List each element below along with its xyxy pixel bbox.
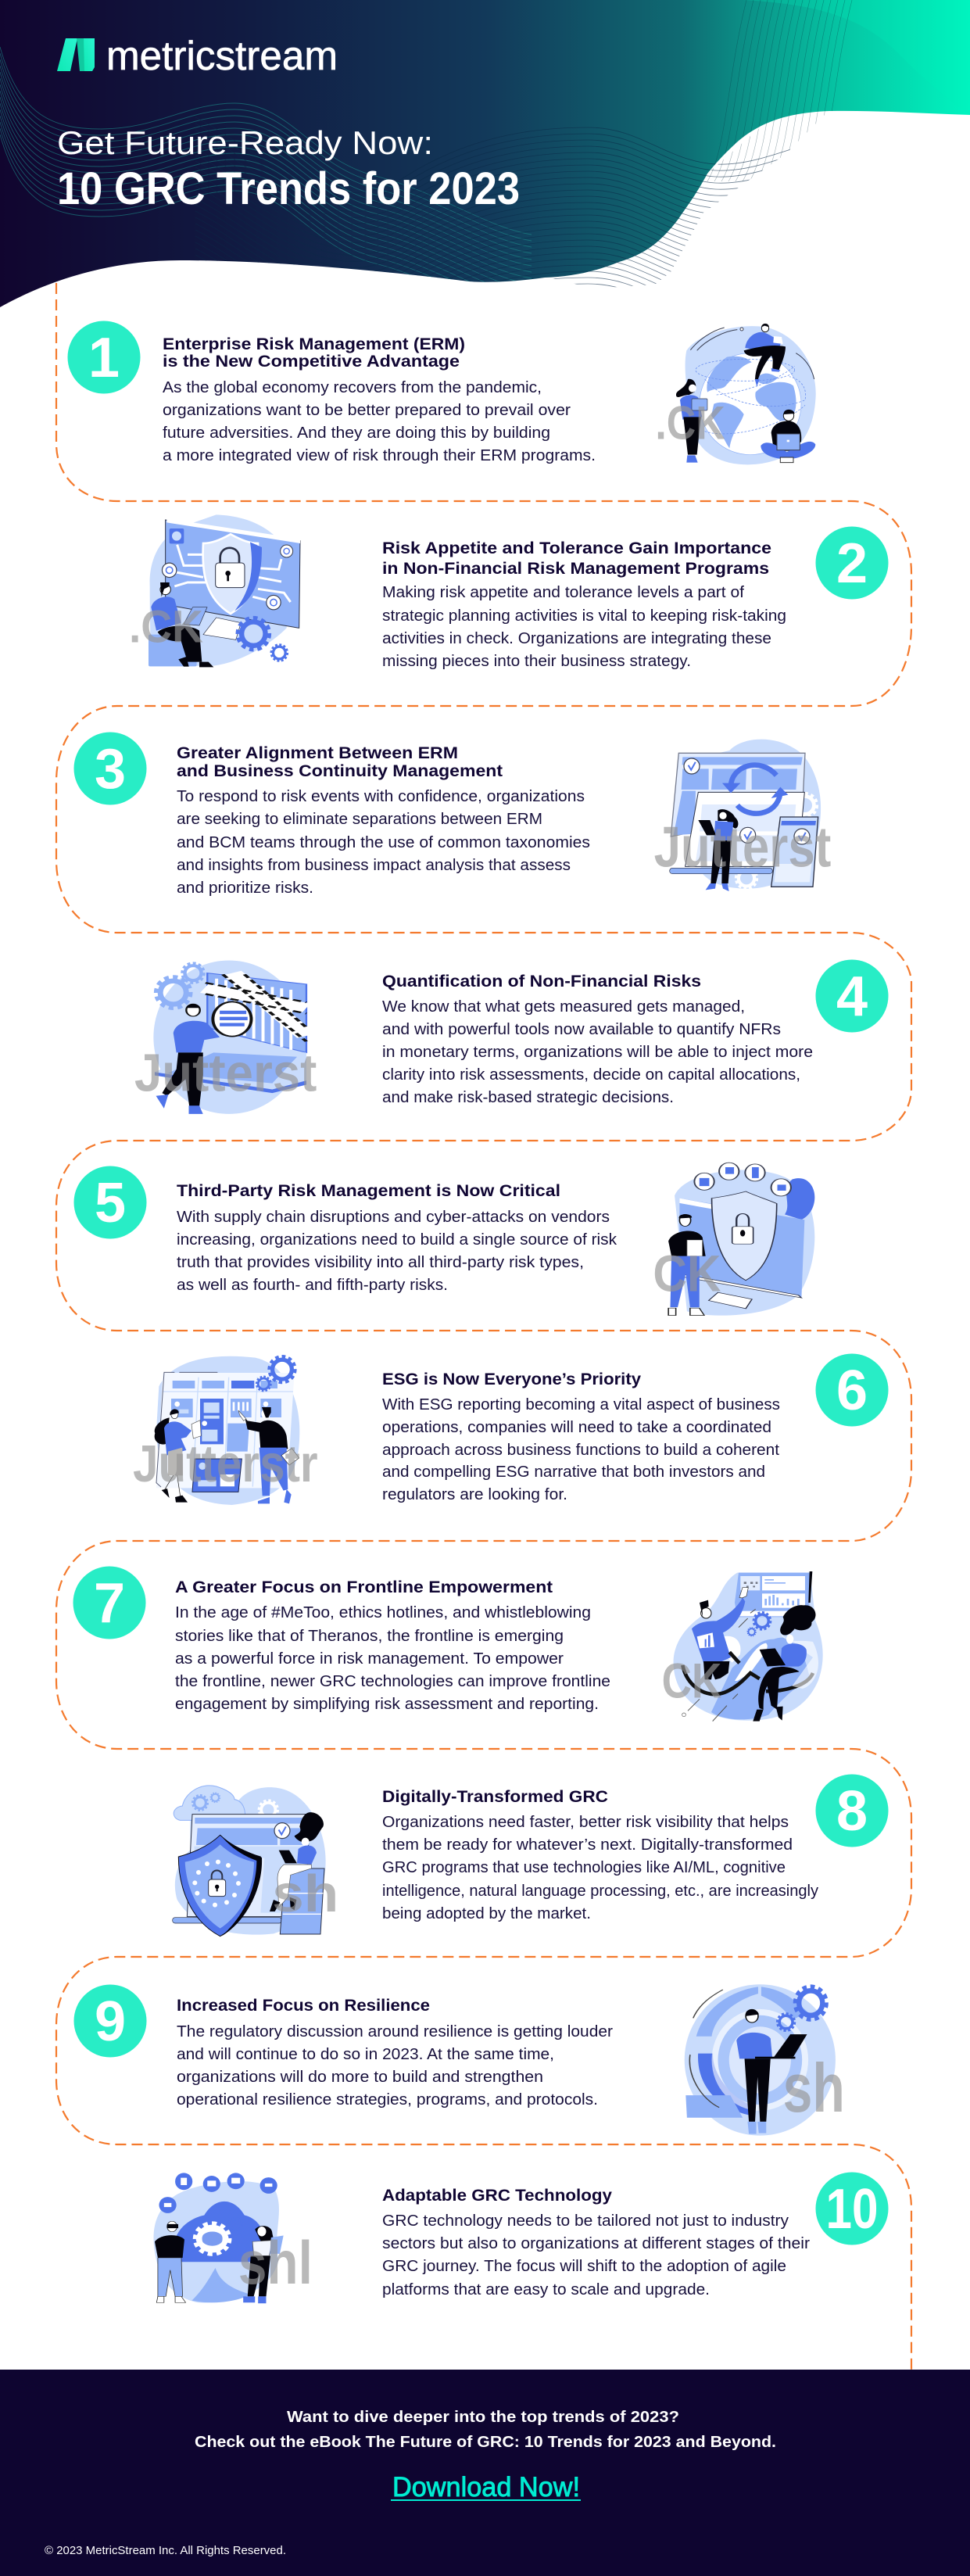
- badge: number 7: 7: [94, 1572, 125, 1635]
- text block: trend 4: We know that what gets measured gets managed,: [382, 998, 745, 1016]
- text block: trend 5: truth that provides visibility into all third-party risk types,: [177, 1254, 584, 1271]
- badge: number 3: 3: [95, 738, 126, 801]
- badge: number 8: 8: [836, 1780, 868, 1843]
- text block: trend 3: and BCM teams through the use of common taxonomies: [177, 834, 590, 851]
- illustration: sync across devices: Jutterst: [654, 815, 831, 879]
- text block: trend 9: The regulatory discussion around resilience is getting louder: [177, 2023, 613, 2040]
- heading: trend 7: A Greater Focus on Frontline Empowerment: [175, 1578, 553, 1596]
- badge: number 10: 10: [825, 2178, 879, 2241]
- text block: trend 10: GRC journey. The focus will shift to the adoption of agile: [382, 2258, 786, 2275]
- heading: trend 9: Increased Focus on Resilience: [177, 1997, 430, 2015]
- badge: number 6: 6: [836, 1360, 868, 1422]
- text block: trend 8: intelligence, natural language processing, etc., are increasingly: [382, 1883, 818, 1900]
- text block: trend 2: Making risk appetite and tolerance levels a part of: [382, 584, 744, 601]
- call to action text: Check out the eBook The Future of GRC: 10 Trends for 2023 and Beyond.: [195, 2433, 776, 2451]
- text block: trend 2: activities in check. Organizations are integrating these: [382, 630, 771, 647]
- text block: trend 6: [382, 1396, 780, 1503]
- heading: trend 3: and Business Continuity Management: [177, 762, 503, 780]
- badge: number 2: [816, 527, 888, 599]
- text block: trend 2: strategic planning activities is vital to keeping risk-taking: [382, 607, 786, 625]
- text block: trend 3: and insights from business impact analysis that assess: [177, 857, 571, 874]
- text block: trend 5: increasing, organizations need to build a single source of risk: [177, 1231, 617, 1249]
- text block: trend 4: clarity into risk assessments, decide on capital allocations,: [382, 1066, 800, 1084]
- badge: number 6: [816, 1354, 888, 1426]
- heading: trend 2: [382, 539, 771, 578]
- illustration: people around globe: .CK: [655, 397, 725, 450]
- text block: trend 4: [382, 998, 813, 1106]
- call to action text: [195, 2408, 776, 2451]
- panel: trend 4: [134, 960, 889, 1114]
- text block: trend 9: operational resilience strategies, programs, and protocols.: [177, 2091, 598, 2108]
- badge: number 7: [73, 1567, 145, 1639]
- illustration: cloud collaboration: [154, 2173, 313, 2303]
- illustration: security shield monitor: [129, 514, 300, 667]
- text block: trend 1: organizations want to be better prepared to prevail over: [163, 402, 571, 419]
- copyright: © 2023 MetricStream Inc. All Rights Reserved.: [45, 2544, 286, 2557]
- illustration: digital shield: [173, 1786, 338, 1936]
- heading: trend 3: [177, 744, 503, 780]
- badge: number 5: [73, 1166, 147, 1238]
- text block: trend 10: platforms that are easy to scale and upgrade.: [382, 2281, 710, 2298]
- illustration: third-party shield: CK: [653, 1245, 721, 1302]
- illustration: security shield monitor: .CK: [129, 602, 203, 653]
- text block: trend 6: regulators are looking for.: [382, 1486, 567, 1503]
- text block: trend 3: [177, 788, 590, 897]
- text block: trend 9: [177, 2023, 613, 2108]
- panel: trend 7: [73, 1567, 823, 1722]
- logo: metricstream: metricstream: [106, 34, 338, 79]
- illustration: frontline empowerment: CK: [662, 1654, 722, 1709]
- footer band: [0, 2370, 970, 2576]
- text block: trend 8: being adopted by the market.: [382, 1905, 591, 1922]
- text block: trend 5: [177, 1209, 617, 1294]
- title: 10 GRC Trends for 2023: [57, 163, 520, 214]
- badge: number 4: [816, 960, 888, 1032]
- header banner: [0, 0, 970, 307]
- text block: trend 10: [382, 2212, 810, 2298]
- illustration: ESG kanban board: [133, 1356, 318, 1505]
- panel: trend 8: [173, 1775, 888, 1936]
- text block: trend 10: GRC technology needs to be tailored not just to industry: [382, 2212, 789, 2230]
- text block: trend 5: as well as fourth- and fifth-party risks.: [177, 1277, 448, 1294]
- download link: Download Now!: [392, 2472, 580, 2503]
- heading: trend 5: Third-Party Risk Management is Now Critical: [177, 1182, 560, 1200]
- badge: number 2: 2: [836, 532, 868, 595]
- heading: trend 3: Greater Alignment Between ERM: [177, 744, 458, 762]
- panel: trend 2: [129, 514, 888, 670]
- panel: trend 6: [133, 1354, 888, 1505]
- badge: number 9: 9: [95, 1990, 126, 2053]
- illustration: people around globe: [655, 324, 816, 464]
- panel: trend 4: Jutterst: [134, 1043, 317, 1102]
- panel: trend 5: [73, 1163, 814, 1316]
- title: Get Future-Ready Now:: [57, 124, 433, 161]
- illustration: data under magnifier: [134, 961, 317, 1114]
- text block: trend 7: In the age of #MeToo, ethics hotlines, and whistleblowing: [175, 1604, 591, 1621]
- illustration: digital shield: sh: [272, 1865, 338, 1923]
- panel: trend 3: [73, 732, 831, 897]
- heading: trend 1: Enterprise Risk Management (ERM): [163, 335, 465, 353]
- heading: trend 1: is the New Competitive Advantage: [163, 353, 460, 371]
- text block: trend 3: are seeking to eliminate separations between ERM: [177, 811, 542, 828]
- text block: trend 8: GRC programs that use technologies like AI/ML, cognitive: [382, 1859, 786, 1876]
- heading: trend 6: ESG is Now Everyone’s Priority: [382, 1370, 641, 1388]
- text block: trend 2: missing pieces into their business strategy.: [382, 653, 691, 670]
- illustration: cloud collaboration: shl: [238, 2229, 313, 2297]
- badge: number 3: [73, 732, 147, 805]
- illustration: third-party shield: [653, 1163, 814, 1316]
- call to action text: Want to dive deeper into the top trends of 2023?: [287, 2408, 679, 2426]
- text block: trend 1: future adversities. And they are doing this by building: [163, 425, 550, 442]
- text block: trend 7: engagement by simplifying risk assessment and reporting.: [175, 1696, 599, 1713]
- panel: trend 9: [73, 1984, 845, 2136]
- heading: trend 8: Digitally-Transformed GRC: [382, 1788, 608, 1806]
- text block: trend 6: approach across business functions to build a coherent: [382, 1442, 779, 1459]
- text block: trend 9: organizations will do more to build and strengthen: [177, 2069, 543, 2086]
- badge: number 9: [73, 1984, 147, 2058]
- text block: trend 6: and compelling ESG narrative that both investors and: [382, 1464, 765, 1481]
- text block: trend 8: them be ready for whatever’s next. Digitally-transformed: [382, 1836, 793, 1854]
- text block: trend 3: To respond to risk events with confidence, organizations: [177, 788, 585, 805]
- text block: trend 8: Organizations need faster, better risk visibility that helps: [382, 1814, 789, 1831]
- text block: trend 4: and with powerful tools now available to quantify NFRs: [382, 1021, 781, 1038]
- text block: trend 4: and make risk-based strategic decisions.: [382, 1089, 674, 1106]
- text block: trend 3: and prioritize risks.: [177, 880, 313, 897]
- text block: trend 7: as a powerful force in risk management. To empower: [175, 1650, 564, 1668]
- heading: trend 2: Risk Appetite and Tolerance Gain Importance: [382, 539, 771, 557]
- text block: trend 4: in monetary terms, organizations will be able to inject more: [382, 1044, 813, 1061]
- text block: trend 1: As the global economy recovers from the pandemic,: [163, 379, 542, 396]
- illustration: resilience rings: sh: [783, 2050, 845, 2126]
- text block: trend 7: stories like that of Theranos, the frontline is emerging: [175, 1628, 564, 1645]
- text block: trend 10: sectors but also to organizations at different stages of their: [382, 2235, 810, 2252]
- badge: number 5: 5: [95, 1172, 126, 1234]
- badge: number 1: [67, 321, 141, 394]
- title: [57, 124, 520, 214]
- text block: trend 5: With supply chain disruptions and cyber-attacks on vendors: [177, 1209, 610, 1226]
- panel: trend 10: [154, 2172, 889, 2303]
- text block: trend 1: a more integrated view of risk through their ERM programs.: [163, 447, 596, 464]
- text block: trend 2: [382, 584, 786, 670]
- illustration: sync across devices: [654, 740, 831, 891]
- illustration: ESG kanban board: Jutterstr: [133, 1435, 318, 1493]
- badge: number 1: 1: [88, 327, 120, 389]
- text block: trend 7: the frontline, newer GRC technologies can improve frontline: [175, 1673, 610, 1690]
- heading: trend 4: Quantification of Non-Financial Risks: [382, 973, 701, 991]
- badge: number 4: 4: [836, 966, 868, 1028]
- text block: trend 1: [163, 379, 596, 464]
- badge: number 8: [816, 1775, 888, 1847]
- text block: trend 6: operations, companies will need to take a coordinated: [382, 1419, 771, 1436]
- heading: trend 1: [163, 335, 465, 371]
- panel: trend 1: [67, 321, 816, 464]
- text block: trend 8: [382, 1814, 818, 1922]
- heading: trend 10: Adaptable GRC Technology: [382, 2187, 612, 2205]
- illustration: resilience rings: [685, 1984, 845, 2136]
- text block: trend 9: and will continue to do so in 2023. At the same time,: [177, 2046, 554, 2063]
- text block: trend 7: [175, 1604, 610, 1713]
- dashed connector path: [56, 283, 911, 2370]
- text block: trend 6: With ESG reporting becoming a vital aspect of business: [382, 1396, 780, 1413]
- illustration: frontline empowerment: [662, 1571, 823, 1722]
- heading: trend 2: in Non-Financial Risk Management Programs: [382, 560, 769, 578]
